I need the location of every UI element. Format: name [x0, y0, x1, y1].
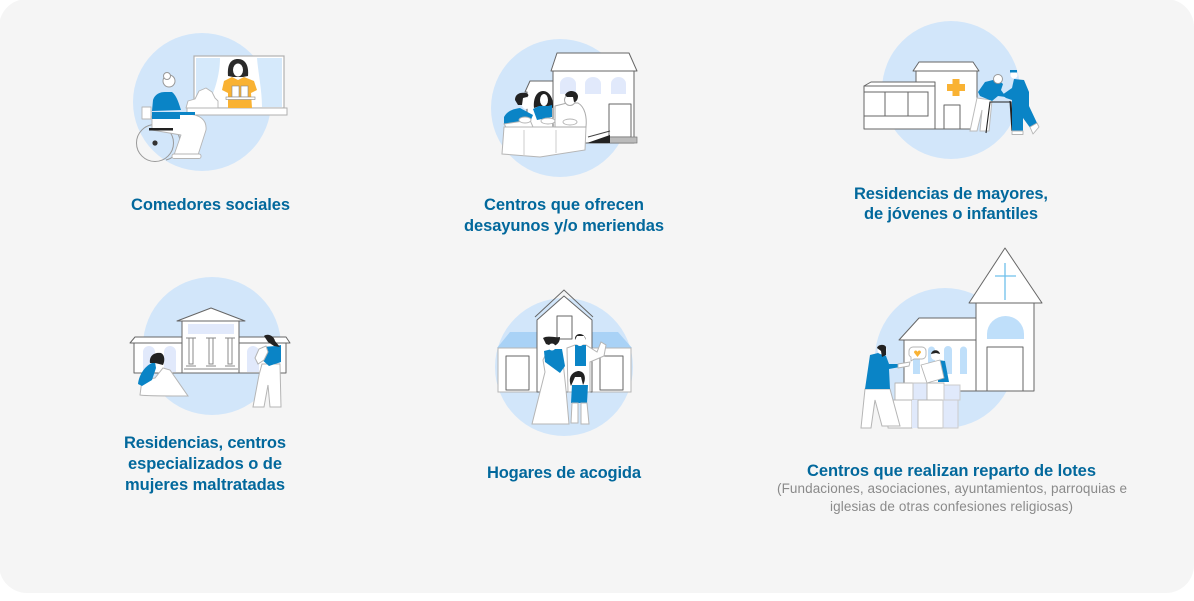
- panel: comedores sociales: [131, 33, 290, 214]
- panel: residencias: [854, 21, 1048, 223]
- label: centros con desayunos y meriendas: desayunos y/o meriendas: [464, 217, 664, 235]
- illustration: care home with nurse and elder: [864, 21, 1039, 159]
- panel: reparto de lotes: [777, 248, 1127, 514]
- label: residencias de mayores: de jóvenes o infantiles: [864, 205, 1038, 223]
- label: centros con desayunos y meriendas: Centros que ofrecen: [484, 196, 644, 214]
- note: tipos de entidades: (Fundaciones, asociaciones, ayuntamientos, parroquias e: [777, 481, 1127, 496]
- illustration: institutional building with two women: [130, 277, 290, 415]
- label: centros con desayunos y meriendas: [464, 196, 664, 235]
- label: residencias y centros especializados: Residencias, centros: [124, 434, 286, 452]
- panel: mujeres maltratadas: [124, 277, 290, 494]
- label: residencias y centros especializados: especializados o de: [128, 455, 282, 473]
- label: hogares de acogida: Hogares de acogida: [487, 464, 642, 482]
- note: tipos de entidades: [777, 481, 1127, 514]
- label: residencias de mayores: [854, 185, 1048, 223]
- illustration: church with volunteers and boxes: [861, 248, 1042, 428]
- note: tipos de entidades: iglesias de otras confesiones religiosas): [830, 499, 1073, 514]
- illustration: wheelchair user and server at a window: [133, 33, 287, 171]
- panel: desayunos y meriendas: [464, 39, 664, 235]
- label: residencias y centros especializados: mujeres maltratadas: [125, 476, 285, 494]
- label: centros que realizan reparto de lotes: Centros que realizan reparto de lotes: [807, 462, 1096, 480]
- label: residencias de mayores: Residencias de mayores,: [854, 185, 1048, 203]
- illustration: family in front of a house: [495, 290, 633, 436]
- panel: hogares de acogida: [487, 290, 642, 482]
- label: comedores sociales: Comedores sociales: [131, 196, 290, 214]
- illustration: family at table beside building: [491, 39, 637, 177]
- label: residencias y centros especializados: [124, 434, 286, 494]
